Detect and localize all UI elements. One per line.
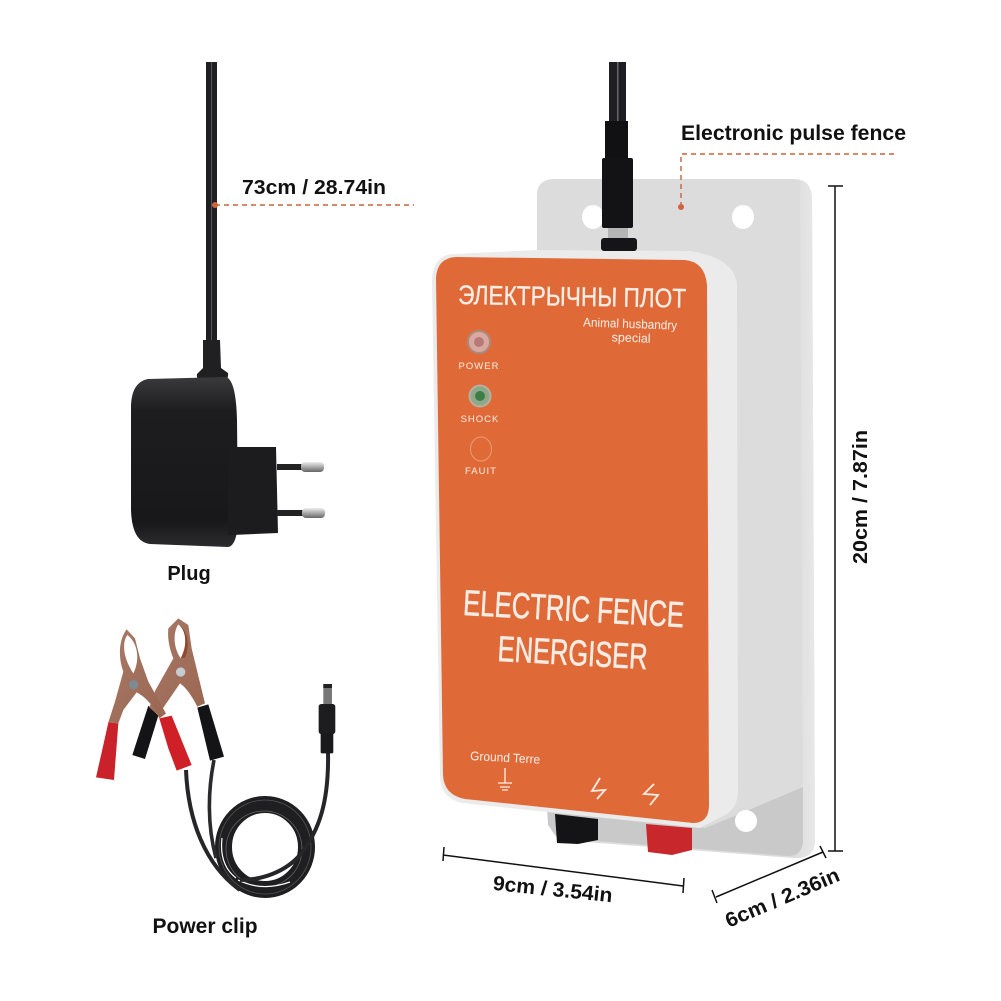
panel subtitle: special — [611, 330, 651, 346]
icon: ground symbol — [498, 768, 512, 790]
plug cord — [206, 62, 217, 354]
ground label: Ground Terre — [470, 749, 541, 767]
power indicator: POWER — [459, 361, 499, 372]
depth dimension — [712, 846, 843, 932]
cable length callout — [212, 177, 414, 208]
mounting holes — [582, 205, 604, 229]
dc barrel plug — [319, 684, 335, 753]
orange front panel — [436, 257, 709, 823]
product name — [462, 582, 685, 677]
product name: ELECTRIC FENCE — [462, 582, 685, 635]
power indicator — [459, 331, 499, 372]
front copper clip — [108, 629, 166, 723]
cable length callout: 73cm / 28.74in — [242, 177, 386, 199]
black terminal — [555, 814, 598, 844]
mounting plate — [537, 179, 815, 858]
icon: lightning bolt right — [644, 784, 658, 805]
height dimension: 20cm / 7.87in — [850, 430, 872, 564]
panel title: ЭЛЕКТРЫЧНЫ ПЛОТ — [458, 280, 686, 314]
product name: ENERGISER — [497, 628, 649, 677]
shock indicator — [461, 386, 499, 425]
panel subtitle — [583, 315, 678, 346]
height dimension — [828, 186, 872, 851]
black sleeve right — [197, 704, 224, 761]
shock indicator: SHOCK — [461, 414, 499, 425]
device cable and connector — [601, 62, 637, 251]
width dimension — [443, 847, 684, 907]
panel subtitle: Animal husbandry — [583, 315, 678, 333]
icon: lightning bolt left — [592, 778, 605, 799]
red sleeve left — [96, 722, 118, 780]
black sleeve rear — [132, 706, 158, 759]
power plug adapter — [131, 340, 325, 547]
electronic pulse fence callout: Electronic pulse fence — [681, 122, 906, 145]
red terminal — [646, 824, 692, 855]
alligator clips — [96, 618, 224, 780]
width dimension: 9cm / 3.54in — [492, 872, 614, 907]
electronic pulse fence callout — [678, 122, 906, 210]
fault indicator — [465, 437, 497, 477]
enclosure body — [432, 250, 738, 828]
fault indicator: FAUIT — [465, 466, 497, 477]
power clip label: Power clip — [152, 915, 258, 938]
depth dimension: 6cm / 2.36in — [722, 864, 843, 932]
red sleeve right — [159, 716, 192, 771]
plug label: Plug — [167, 563, 211, 585]
rear copper clip — [149, 618, 205, 715]
clip cable and coil — [186, 752, 328, 894]
energiser device — [432, 62, 815, 858]
